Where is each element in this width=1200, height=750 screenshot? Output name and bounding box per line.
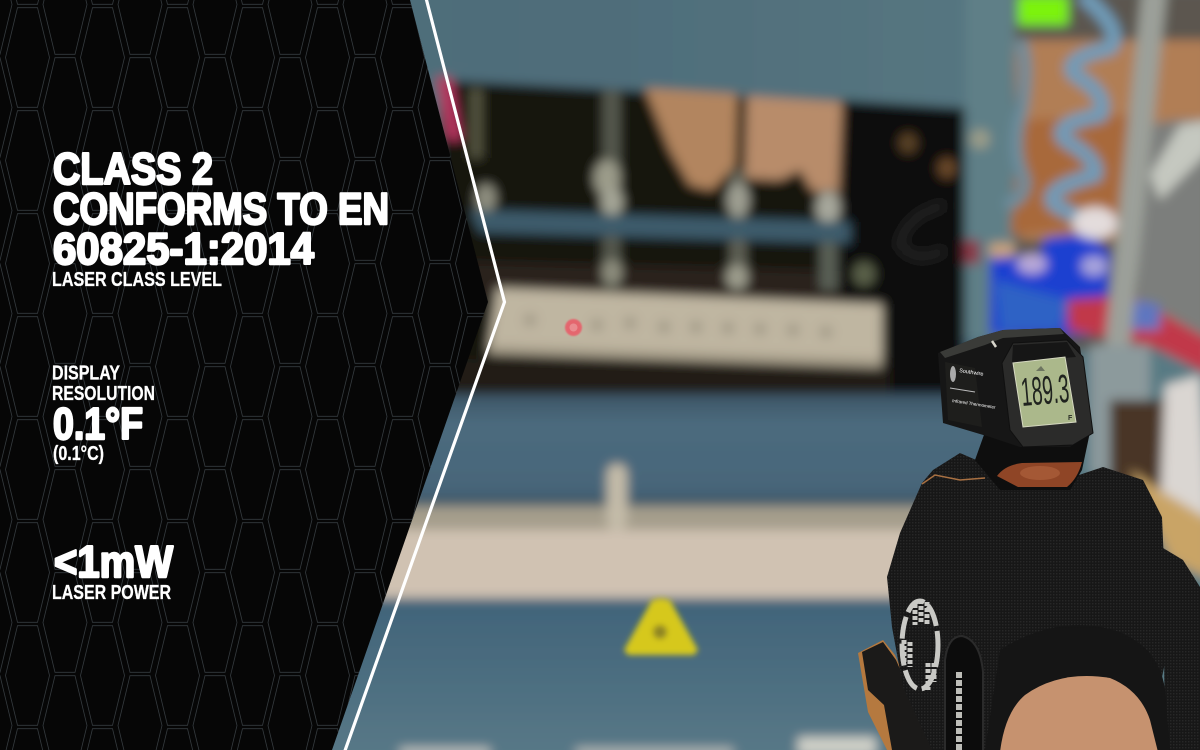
side label <box>945 362 996 427</box>
LCD screen: F <box>1068 415 1073 422</box>
grip <box>975 432 1090 490</box>
gloved hand <box>858 453 1200 750</box>
LCD screen <box>1013 357 1076 427</box>
label: laser power: LASER POWER <box>52 581 171 604</box>
heading: class 2: 60825-1:2014 <box>53 225 314 274</box>
glove logo <box>902 600 938 690</box>
heading: class 2: CLASS 2 <box>53 145 213 194</box>
lower machine panels <box>300 288 1020 750</box>
forearm skin <box>1000 676 1158 750</box>
tan leather finger <box>858 640 935 750</box>
machine window opening <box>436 76 965 400</box>
side label: Southwire <box>959 368 984 378</box>
value: 0.1 C: (0.1°C) <box>53 442 104 465</box>
white chevron line <box>344 0 504 750</box>
label: display resolution: DISPLAY <box>52 362 120 384</box>
LCD screen: 189.3 <box>1019 367 1071 415</box>
heading: class 2 <box>53 145 389 274</box>
trigger <box>997 462 1082 487</box>
laser dot <box>565 319 582 336</box>
body <box>938 328 1093 447</box>
label: laser class level: LASER CLASS LEVEL <box>52 268 222 291</box>
label: display resolution: RESOLUTION <box>52 382 155 405</box>
black hexagon panel <box>0 0 488 750</box>
wrist strap tab <box>945 636 983 750</box>
right finger <box>1163 548 1200 750</box>
label: display resolution <box>52 362 155 405</box>
warning triangle sign <box>624 598 698 655</box>
heading: class 2: CONFORMS TO EN <box>53 185 389 234</box>
value: 0.1 F: 0.1°F <box>53 400 143 449</box>
right column and workshop background <box>964 0 1200 580</box>
infrared thermometer <box>938 328 1093 490</box>
glove back <box>887 453 1172 750</box>
side label: Infrared Thermometer <box>952 398 996 410</box>
mark on housing <box>992 341 996 347</box>
value: laser power: <1mW <box>54 538 173 587</box>
bezel <box>1002 340 1093 447</box>
